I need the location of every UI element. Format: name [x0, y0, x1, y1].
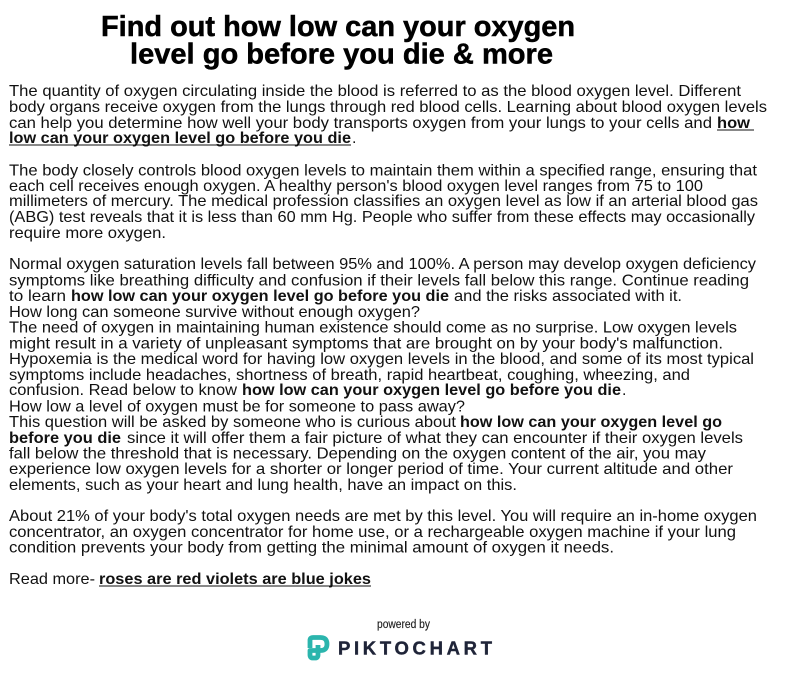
paragraph: blood oxygen level intro: .	[352, 130, 356, 147]
paragraph: blood oxygen level intro	[9, 83, 767, 147]
paragraph: blood oxygen level intro: can help you determine how well your body transports oxygen from your lungs to your cells and	[9, 115, 712, 132]
paragraph: saturation and survival	[9, 256, 756, 494]
paragraph: blood oxygen level intro: low can your oxygen level go before you die	[9, 130, 351, 147]
paragraph: oxygen concentrator: About 21% of your body's total oxygen needs are met by this level. You will require an in-home oxygen	[9, 508, 757, 525]
title: Find out how low can your oxygen	[101, 11, 575, 43]
paragraph: blood oxygen level intro: The quantity of oxygen circulating inside the blood is referred to as the blood oxygen level. Different	[9, 83, 742, 100]
paragraph: saturation and survival: confusion. Read below to know	[9, 382, 237, 399]
paragraph: saturation and survival: elements, such as your heart and lung health, have an impact on this.	[9, 477, 517, 494]
paragraph: saturation and survival: how low can your oxygen level go before you die	[71, 288, 449, 305]
paragraph: saturation and survival: fall below the threshold that is necessary. Depending on the oxygen content of the air, you may	[9, 446, 706, 462]
paragraph: saturation and survival: might result in a variety of unpleasant symptoms that are brought on by your body's malfunction.	[9, 336, 723, 352]
paragraph: normal oxygen range: millimeters of mercury. The medical profession classifies an oxygen level as low if an arterial blood gas	[9, 193, 758, 210]
title	[101, 11, 575, 70]
paragraph: blood oxygen level intro: how	[717, 115, 751, 132]
paragraph: saturation and survival: how low can your oxygen level go before you die	[242, 382, 621, 399]
paragraph: oxygen concentrator	[9, 508, 757, 556]
title: level go before you die & more	[130, 38, 553, 70]
paragraph: normal oxygen range: (ABG) test reveals that it is less than 60 mm Hg. People who suffer from these effects may occasionally	[9, 209, 755, 226]
paragraph: saturation and survival: .	[622, 382, 626, 399]
paragraph: saturation and survival: since it will offer them a fair picture of what they can encounter if their oxygen levels	[127, 430, 743, 447]
paragraph: saturation and survival: to learn	[9, 288, 66, 305]
icon: Piktochart mark	[310, 638, 327, 658]
paragraph: saturation and survival: before you die	[9, 430, 121, 447]
paragraph: saturation and survival: symptoms like breathing difficulty and confusion if their levels fall below this range. Continue reading	[9, 272, 749, 290]
paragraph: normal oxygen range: each cell receives enough oxygen. A healthy person's blood oxygen level ranges from 75 to 100	[9, 178, 703, 195]
powered by Piktochart logo: PIKTOCHART	[338, 637, 493, 658]
paragraph: saturation and survival: how low can your oxygen level go	[460, 414, 722, 431]
paragraph: blood oxygen level intro: body organs receive oxygen from the lungs through red blood cells. Learning about blood oxygen levels	[9, 99, 767, 116]
read more link: Read more-	[9, 571, 95, 588]
paragraph: oxygen concentrator: concentrator, an oxygen concentrator for home use, or a rechargeable oxygen machine if your lung	[9, 524, 736, 541]
paragraph: normal oxygen range	[9, 162, 758, 242]
paragraph: oxygen concentrator: condition prevents your body from getting the minimal amount of oxygen it needs.	[9, 540, 614, 556]
paragraph: saturation and survival: How long can someone survive without enough oxygen?	[9, 304, 420, 321]
paragraph: saturation and survival: The need of oxygen in maintaining human existence should come as no surprise. Low oxygen levels	[9, 320, 737, 336]
paragraph: saturation and survival: experience low oxygen levels for a shorter or longer period of time. Your current altitude and other	[9, 461, 734, 478]
powered by Piktochart logo	[310, 619, 493, 658]
paragraph: saturation and survival: This question will be asked by someone who is curious about	[9, 414, 457, 431]
paragraph: saturation and survival: symptoms include headaches, shortness of breath, rapid heartbeat, coughing, wheezing, and	[9, 367, 690, 384]
paragraph: normal oxygen range: require more oxygen.	[9, 225, 166, 242]
read more link: roses are red violets are blue jokes	[99, 571, 371, 588]
paragraph: saturation and survival: Normal oxygen saturation levels fall between 95% and 100%. A person may develop oxygen deficiency	[9, 256, 756, 273]
paragraph: saturation and survival: Hypoxemia is the medical word for having low oxygen levels in the blood, and some of its most typical	[9, 351, 754, 368]
paragraph: normal oxygen range: The body closely controls blood oxygen levels to maintain them within a specified range, ensuring that	[9, 162, 758, 180]
powered by Piktochart logo: powered by	[377, 619, 430, 631]
paragraph: saturation and survival: How low a level of oxygen must be for someone to pass away?	[9, 398, 465, 416]
paragraph: saturation and survival: and the risks associated with it.	[454, 288, 682, 305]
